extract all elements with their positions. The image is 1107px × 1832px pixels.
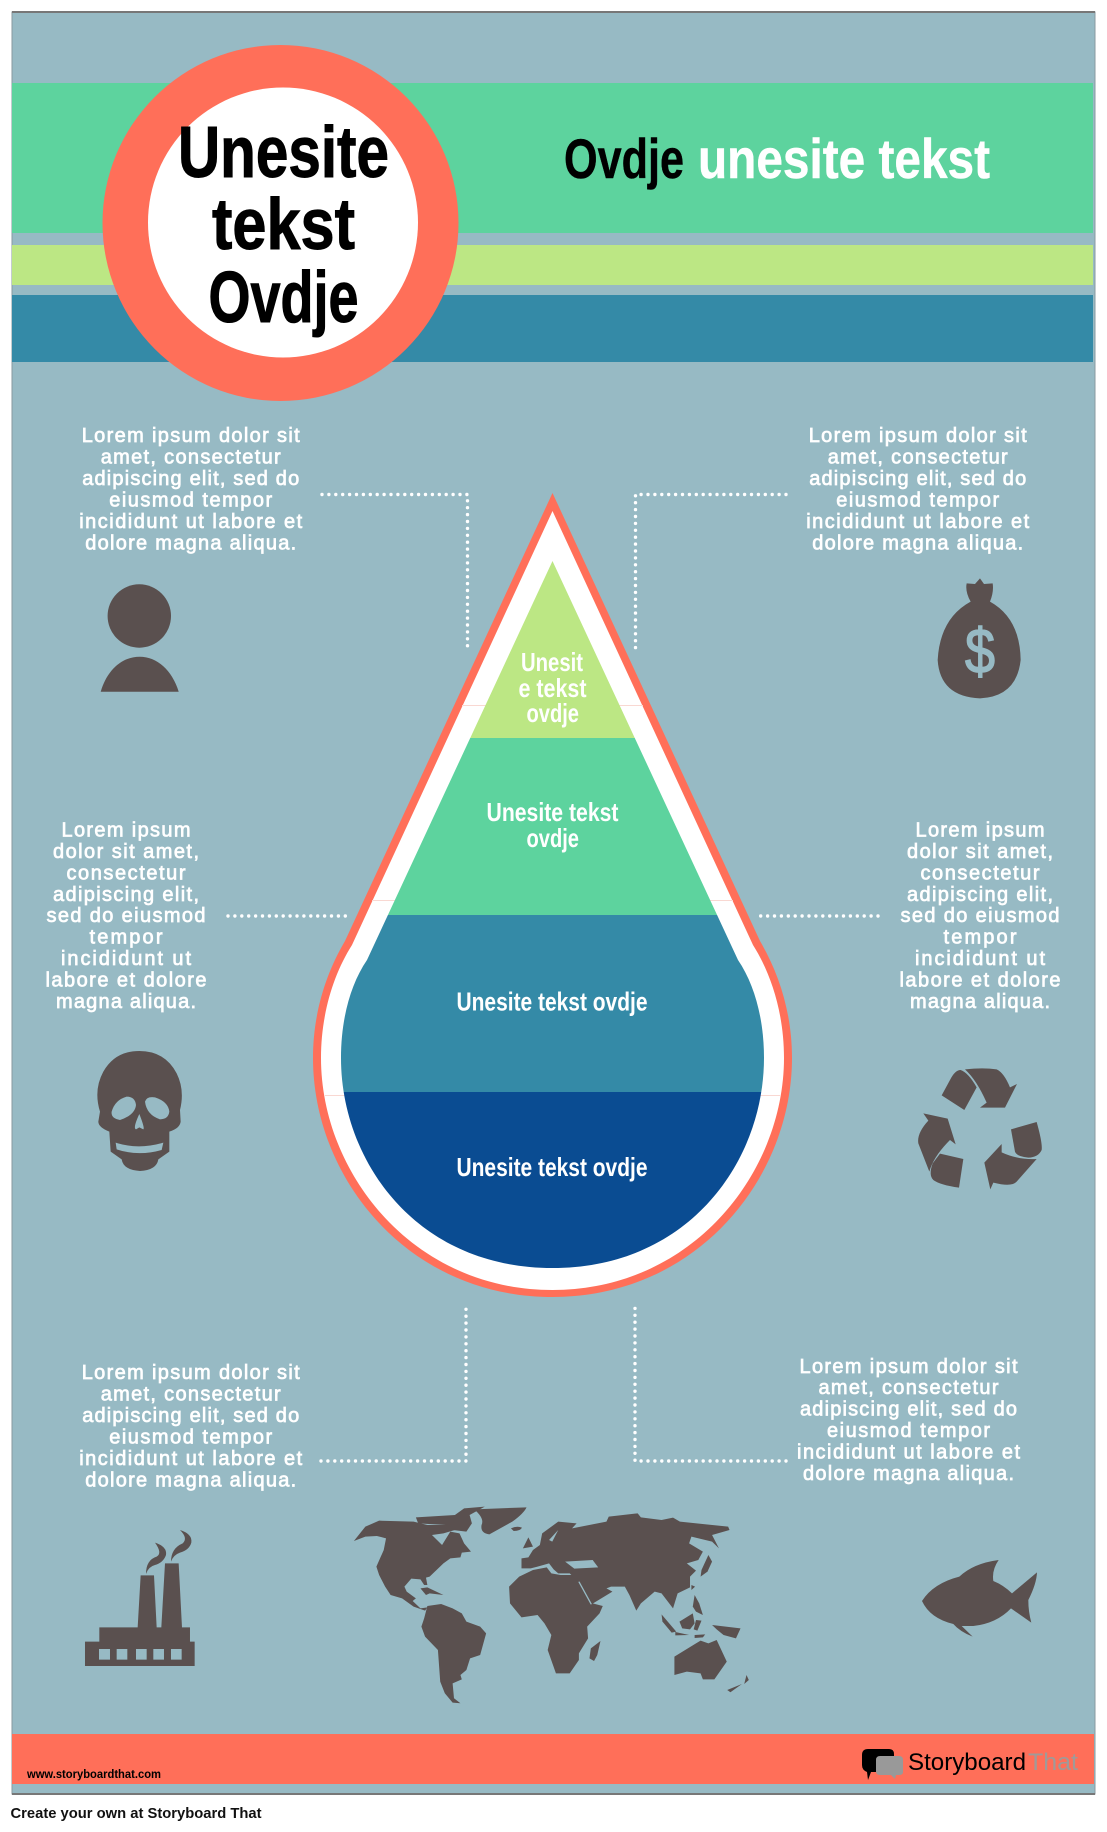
text block: middle right: tempor [944, 927, 1017, 949]
text block: middle right: Lorem ipsum [916, 820, 1044, 842]
title text: Ovdje [208, 258, 358, 338]
text block: middle right: dolor sit amet, [907, 841, 1053, 863]
dotted connector: top right [636, 494, 786, 652]
text block: middle left [46, 820, 206, 1013]
drop label: green layer [486, 797, 619, 853]
title badge [102, 45, 458, 401]
footer url: www.storyboardthat.com [26, 1767, 161, 1781]
text block: middle right: labore et dolore [900, 969, 1060, 991]
subtitle: Ovdje [564, 127, 684, 190]
drop label: lime layer: ovdje [526, 698, 579, 728]
drop label: lime layer: Unesit [521, 647, 583, 677]
drop label: lime layer [518, 647, 587, 728]
text block: top right: dolore magna aliqua. [812, 532, 1023, 554]
logo: storyboard that: That [1028, 1749, 1078, 1776]
text block: bottom right: Lorem ipsum dolor sit [800, 1356, 1018, 1378]
text block: top right: amet, consectetur [828, 446, 1008, 468]
text block: bottom left: amet, consectetur [101, 1384, 281, 1406]
text block: middle left: tempor [90, 927, 163, 949]
drop label: lime layer: e tekst [518, 673, 587, 703]
subtitle: unesite tekst [698, 127, 990, 190]
text block: top left: eiusmod tempor [109, 490, 273, 512]
text block: top left: incididunt ut labore et [79, 511, 303, 533]
credit line: Create your own at Storyboard That [10, 1805, 262, 1822]
drop label: green layer: Unesite tekst [486, 797, 619, 827]
drop layer: green [388, 738, 717, 915]
text block: bottom right: amet, consectetur [818, 1377, 999, 1399]
drop label: green layer: ovdje [526, 823, 579, 853]
dotted connector: top left [322, 494, 468, 652]
text block: bottom left [79, 1362, 303, 1492]
text block: middle left: dolor sit amet, [53, 841, 199, 863]
icon: person [101, 584, 179, 692]
text block: bottom left: eiusmod tempor [109, 1426, 273, 1448]
text block: middle left: adipiscing elit, [53, 884, 199, 906]
icon: money bag [938, 578, 1021, 698]
dotted connector: middle left [228, 914, 346, 918]
icon: fish [922, 1560, 1037, 1637]
text block: top left: amet, consectetur [101, 446, 281, 468]
header band: green [12, 83, 1093, 233]
text block: bottom right: incididunt ut labore et [797, 1442, 1020, 1464]
text block: top left: dolore magna aliqua. [85, 532, 296, 554]
text block: middle right: magna aliqua. [910, 991, 1050, 1013]
icon: recycling arrows [918, 1068, 1042, 1189]
drop layer: teal [341, 915, 764, 1092]
icon: skull [97, 1051, 182, 1171]
subtitle [564, 127, 990, 190]
water drop diagram [300, 493, 810, 1297]
text block: top left: Lorem ipsum dolor sit [82, 425, 300, 447]
text block: middle right: consectetur [920, 862, 1040, 884]
text block: bottom left: Lorem ipsum dolor sit [82, 1362, 300, 1384]
drop layer: navy [344, 1092, 762, 1268]
header band: teal [12, 295, 1093, 362]
title text: Unesite [178, 113, 389, 193]
text block: middle left: labore et dolore [46, 969, 206, 991]
icon: money bag: $ [965, 617, 995, 687]
dotted connector: bottom left [321, 1304, 466, 1461]
text block: middle right: sed do eiusmod [900, 905, 1060, 927]
header band: lime [12, 245, 1093, 285]
dotted connector: middle right [759, 914, 878, 918]
text block: bottom right: dolore magna aliqua. [803, 1463, 1014, 1485]
logo: storyboard that: Storyboard [908, 1749, 1026, 1776]
text block: middle left: Lorem ipsum [62, 820, 190, 842]
text block: middle left: consectetur [66, 862, 186, 884]
icon: factory [85, 1530, 195, 1666]
text block: top right: adipiscing elit, sed do [809, 468, 1026, 490]
text block: middle left: magna aliqua. [56, 991, 196, 1013]
text block: middle right [900, 820, 1060, 1013]
world map [354, 1507, 749, 1703]
drop label: navy layer: Unesite tekst ovdje [456, 1152, 648, 1182]
footer band [12, 1734, 1094, 1784]
text block: bottom left: dolore magna aliqua. [85, 1470, 296, 1492]
text block: bottom right [797, 1356, 1020, 1485]
text block: bottom right: adipiscing elit, sed do [800, 1399, 1017, 1421]
text block: top right: eiusmod tempor [836, 490, 1000, 512]
dotted connector: bottom right [635, 1304, 786, 1461]
text block: middle left: sed do eiusmod [46, 905, 206, 927]
drop label: teal layer: Unesite tekst ovdje [456, 986, 648, 1016]
title text [178, 113, 389, 338]
logo: storyboard that [862, 1749, 1078, 1780]
text block: top left [79, 425, 303, 554]
text block: middle right: adipiscing elit, [907, 884, 1053, 906]
text block: middle left: incididunt ut [61, 948, 191, 970]
text block: top right: incididunt ut labore et [806, 511, 1030, 533]
text block: top right [806, 425, 1030, 554]
drop layer: lime [470, 561, 635, 738]
text block: top left: adipiscing elit, sed do [82, 468, 299, 490]
text block: bottom right: eiusmod tempor [827, 1420, 990, 1442]
text block: bottom left: adipiscing elit, sed do [82, 1405, 299, 1427]
text block: middle right: incididunt ut [915, 948, 1045, 970]
text block: bottom left: incididunt ut labore et [79, 1448, 303, 1470]
title text: tekst [212, 185, 355, 265]
text block: top right: Lorem ipsum dolor sit [809, 425, 1027, 447]
